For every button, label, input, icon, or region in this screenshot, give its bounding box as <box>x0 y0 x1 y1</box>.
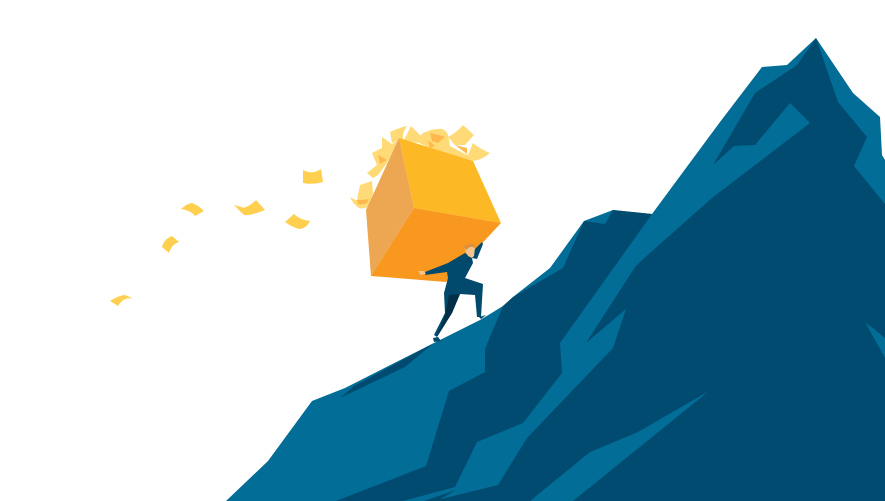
cube: top face <box>399 138 501 223</box>
pile: pale sheets <box>350 125 490 209</box>
pile of papers behind cube <box>350 125 490 209</box>
paper 2 <box>234 200 265 215</box>
paper 3 <box>285 214 310 229</box>
mountain: right edge facet <box>865 322 885 358</box>
man: head <box>464 246 475 258</box>
paper 5 <box>162 236 179 253</box>
mountain <box>226 38 885 501</box>
man: body and arms <box>425 253 483 337</box>
cube: bottom face <box>371 208 501 282</box>
cube: left face <box>366 138 414 276</box>
mountain: dark sliver under the man <box>340 343 434 398</box>
man: raised arm <box>472 242 483 259</box>
mountain: main dark face <box>433 38 885 501</box>
man: shaded thigh <box>437 294 460 337</box>
pile: overlap shadows <box>357 133 467 204</box>
paper 1 <box>303 169 323 184</box>
paper 6 <box>110 295 133 306</box>
flying papers <box>110 169 323 306</box>
man: back shoe <box>479 315 486 319</box>
man: hair <box>463 244 476 250</box>
paper 4 <box>181 203 204 216</box>
man: front shoe <box>433 337 441 342</box>
cube <box>366 138 501 282</box>
mountain: small dark crack at base <box>424 490 456 501</box>
man: hand <box>418 271 426 275</box>
man in suit <box>418 242 486 342</box>
mountain: left dark facet <box>336 210 652 501</box>
mountain: light silhouette <box>226 38 885 501</box>
